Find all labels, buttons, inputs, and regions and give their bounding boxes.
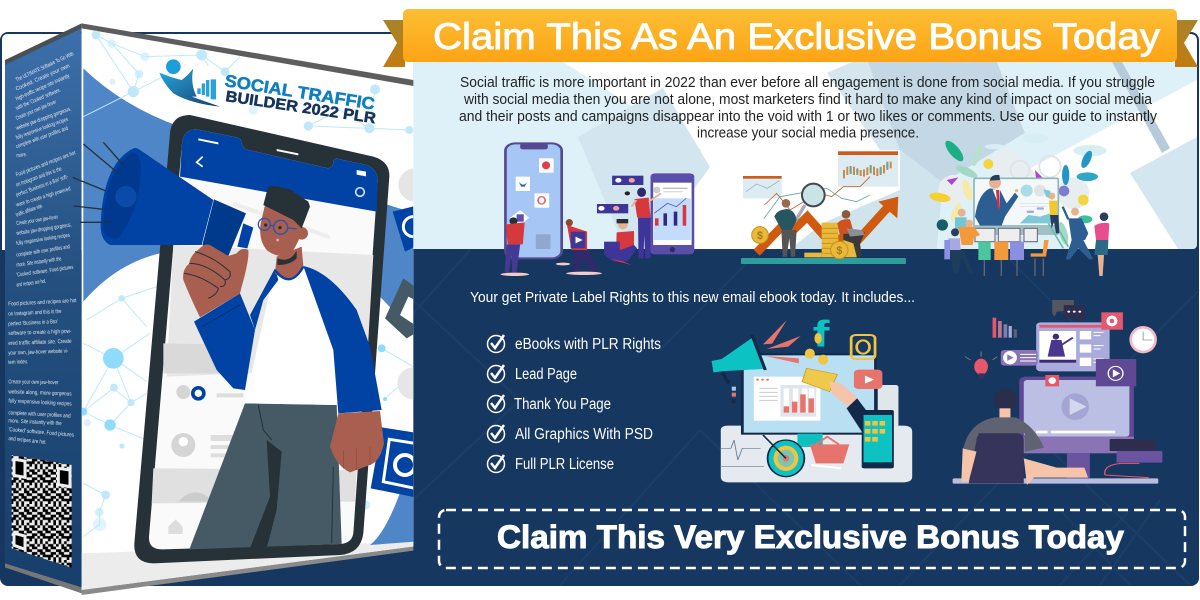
team members [944,209,980,273]
woman with crossed arms [1094,212,1109,276]
box side text: The ULTIMATE Software To Go With [15,51,75,83]
box side text: and recipes are hot. [16,278,47,289]
illustration: online video viewer [953,300,1162,485]
call to action [439,510,1185,568]
megaphone [712,320,801,383]
item: thank you page: Thank You Page [514,396,611,413]
item: license: Full PLR License [515,456,614,473]
background swoosh [83,68,180,302]
intro paragraph [459,75,1158,142]
panel: light top section [2,34,1197,250]
gear badges [1045,312,1123,386]
social icon cards [370,168,414,497]
box side text: website jaw-dropping gorgeous, [15,222,72,237]
megaphone [73,142,253,256]
screen header [180,129,378,212]
box side text: on Instagram and this is the [15,166,63,189]
box side text: Food pictures and recipes are hot [8,298,77,308]
box side text: more. Site instantly with the [8,418,62,427]
social icons: f [813,314,830,355]
person on ladder [1048,193,1068,248]
ribbon tails [383,20,1198,67]
item: license [488,455,614,473]
box side text: software to create a high pow- [8,329,72,337]
coins: $ [757,230,763,242]
intro paragraph: and their posts and campaigns disappear into the void with 1 or two likes or comments. Use our guide to instantly [459,109,1158,125]
person: sitting with laptop [604,219,637,265]
subheading: Your get Private Label Rights to this new email ebook today. It includes... [470,290,915,306]
box side text: 'Cooked' software. Food pictures [16,265,74,279]
product logo: BUILDER 2022 PLR [224,88,377,127]
box side text: perfect 'Business in a Box' [8,319,58,328]
illustration: digital marketing [712,314,912,482]
box side text: your own, jaw-hover website vi- [8,349,68,357]
social cards [510,158,554,249]
box side text: fully responsive looking recipes [8,398,72,408]
chat bubbles [597,176,643,213]
screen feed [167,245,373,377]
box side text: 'Cooked' software. Food pictures [8,427,74,439]
desk with monitors [970,228,1049,276]
chart card: large [838,151,898,187]
network lines [83,35,413,537]
person viewed from behind [961,389,1088,485]
box side text: more. Site instantly with the [16,256,62,269]
clock [1129,326,1157,353]
logo text: SOCIAL TRAFFIC [223,71,376,114]
item: graphics: All Graphics With PSD [515,426,653,443]
basket [810,437,849,468]
box side text: high-traffic recipe site instantly [15,73,71,102]
intro paragraph: with social media then you are not alone, most marketers find it hard to make any kind of impact on social media [463,92,1153,108]
box side face [5,23,82,593]
box side text: website jaw-dropping gorgeous, [15,106,72,132]
item: lead page: Lead Page [515,366,577,383]
person: red shirt left [501,217,529,276]
coins [752,223,857,259]
box side text: perfect 'Business in a Box' soft- [15,174,69,199]
white shirt [245,267,337,405]
presenter [975,175,1018,226]
coins: $ [836,245,842,257]
gears and clouds background [938,134,1107,209]
phone screen [149,129,378,549]
phone body [134,115,389,563]
box side text: tem index. [8,359,29,366]
indicator dots [732,387,736,391]
trousers [189,403,342,549]
left phone [505,143,562,258]
head [260,205,303,256]
box side text: Food pictures and recipes are hot [15,150,77,179]
presentation screen [974,178,1058,235]
box front face [79,23,415,595]
fist left [183,244,248,317]
box side text: Create your own jaw-hover [16,214,59,227]
box side text: Create your own jaw-hover [15,99,57,122]
desk [953,478,1158,484]
target [763,435,804,477]
neck [275,247,303,279]
person: with tablet [556,219,602,275]
light bulb [965,352,997,379]
magnifier [795,184,825,222]
box side text: fully responsive looking recipes [16,233,70,247]
title: Claim This As An Exclusive Bonus Today [433,16,1161,57]
logo icon [159,59,220,107]
ground base [741,258,906,264]
illustration: finance growth [741,151,906,264]
ribbon title banner [403,9,1177,62]
left sleeve [194,293,255,390]
monitor [742,354,875,447]
icon: QR code [12,455,72,568]
right phone [651,173,694,254]
heartbeat chart [720,440,764,467]
item: eBooks: eBooks with PLR Rights [515,336,661,353]
leaves [929,138,1098,246]
social icons [805,314,882,389]
box side text: complete with user profiles and [8,410,71,420]
play bar [1001,350,1038,366]
smartphone [862,410,894,468]
bars [993,318,1017,338]
box side text: complete with user profiles and [16,244,70,259]
box side text [7,51,77,446]
box side text: more. [16,152,28,159]
box side text: with the 'Cooked' software. [14,87,62,112]
person right [837,210,865,257]
box side text: ered traffic affiliate site. Create [8,339,72,347]
person left [774,199,797,257]
box side text: and recipes are hot. [8,436,47,446]
product logo [159,59,377,127]
checklist [488,335,661,473]
box side text: ware to create a high powered [15,186,71,209]
person: standing woman [632,188,661,258]
base panels [721,426,912,482]
chat bubbles [1052,300,1084,322]
books [1105,439,1162,478]
product box [5,23,432,595]
item: lead page [488,365,577,383]
illustration: presentation team [929,134,1109,276]
box side text: website along, more gorgeous [7,389,72,398]
right sleeve [303,266,382,413]
video card [1036,322,1110,371]
box side text: Create your own jaw-hover [8,379,58,386]
phone mockup [134,115,389,563]
illustration: social media phones [501,143,694,276]
intro paragraph: increase your social media presence. [697,126,919,142]
fist right [330,411,384,472]
big arrow [757,197,898,253]
intro paragraph: Social traffic is more important in 2022 than ever before all engagement is done from social media. If you struggle [460,75,1155,91]
call to action text: Claim This Very Exclusive Bonus Today [497,519,1124,555]
monitor [1019,377,1134,478]
left raglan strip [250,268,278,330]
hand with banknote [802,368,882,435]
person with megaphone [73,142,384,549]
item: thank you page [488,395,611,413]
box side text: on Instagram and this is the [8,309,62,318]
box side text: complete with user profiles and [15,126,69,150]
man walking [1063,207,1093,259]
box side text: traffic affiliate site. [15,203,44,219]
box side text: fully responsive looking recipes [15,117,69,141]
video window [1096,359,1136,386]
chart card: small [743,176,782,198]
box side text: Cooked. Create your own [15,63,71,92]
trend lines [764,177,870,218]
